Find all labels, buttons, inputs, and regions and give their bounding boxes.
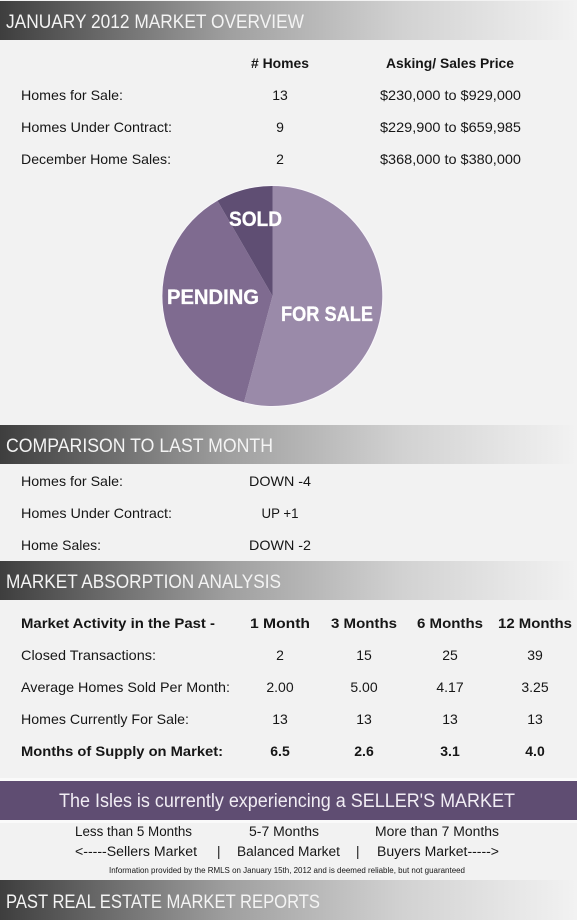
table: market absorption: 25 [442,647,458,663]
table: market absorption: 2 [276,647,284,663]
table: market overview: Asking/ Sales Price [386,55,514,71]
table: market absorption: Average Homes Sold Per Month: [21,679,230,695]
header: January 2012 market overview [0,1,577,40]
table: market absorption: 3.25 [521,679,549,695]
table: market absorption: 13 [527,711,543,727]
legend: market type scale [75,824,499,859]
pie chart: homes by status [162,185,384,407]
table: market absorption: 2.00 [266,679,294,695]
table: market overview: Homes for Sale: [21,87,123,103]
header: January 2012 market overview: JANUARY 2012 MARKET OVERVIEW [6,12,304,33]
table: comparison to last month [21,473,311,553]
table: market absorption: 5.00 [350,679,378,695]
table: market absorption: 13 [442,711,458,727]
table: market absorption: Homes Currently For Sale: [21,711,189,727]
table: market absorption: Months of Supply on Market: [21,743,223,759]
legend: market type scale: <-----Sellers Market [75,844,197,859]
table: comparison to last month: DOWN -2 [249,537,311,553]
table: market absorption: 13 [272,711,288,727]
table: market absorption: Closed Transactions: [21,647,156,663]
table: market absorption: 6 Months [417,615,483,631]
table: comparison to last month: Homes for Sale: [21,473,123,489]
header: past real estate market reports: PAST REAL ESTATE MARKET REPORTS [6,892,320,913]
banner: seller's market [0,778,577,823]
table: market overview: 9 [276,119,284,135]
disclaimer: Information provided by the RMLS on January 15th, 2012 and is deemed reliable, but not guaranteed [109,866,465,875]
legend: market type scale: 5-7 Months [249,824,319,839]
table: market absorption: Market Activity in the Past - [21,615,215,631]
table: market absorption: 12 Months [498,615,572,631]
header: comparison to last month [0,425,577,464]
table: market overview [21,55,521,167]
legend: market type scale: Less than 5 Months [75,824,192,839]
pie slice: pending [162,201,272,402]
legend: market type scale: More than 7 Months [375,824,499,839]
header: market absorption analysis: MARKET ABSORPTION ANALYSIS [6,572,281,593]
table: market overview: # Homes [251,55,309,71]
table: market absorption: 3 Months [331,615,397,631]
table: market absorption: 4.0 [525,743,545,759]
table: market overview: December Home Sales: [21,151,171,167]
header: comparison to last month: COMPARISON TO LAST MONTH [6,436,273,457]
pie slice: for sale [244,186,382,406]
table: market overview: $229,900 to $659,985 [380,119,521,135]
table: market absorption: 4.17 [436,679,464,695]
table: market absorption: 13 [356,711,372,727]
table: market absorption: 39 [527,647,543,663]
table: market absorption: 3.1 [440,743,460,759]
pie slice: sold [218,186,272,296]
table: market absorption: 15 [356,647,372,663]
legend: market type scale: Balanced Market [237,844,340,859]
table: market overview: $230,000 to $929,000 [380,87,521,103]
pie label: for sale: FOR SALE [281,303,373,326]
pie label: sold: SOLD [229,208,282,231]
legend: market type scale: | [217,844,221,859]
table: market absorption [21,615,572,759]
legend: market type scale: Buyers Market-----> [377,844,499,859]
table: market absorption: 6.5 [270,743,290,759]
table: market overview: 2 [276,151,284,167]
header: market absorption analysis [0,561,577,600]
table: comparison to last month: Home Sales: [21,537,101,553]
table: market overview: 13 [272,87,288,103]
table: market absorption: 1 Month [250,615,310,631]
table: comparison to last month: DOWN -4 [249,473,311,489]
legend: market type scale: | [356,844,360,859]
header: past real estate market reports [0,880,577,920]
table: market absorption: 2.6 [354,743,374,759]
table: market overview: Homes Under Contract: [21,119,172,135]
banner: seller's market: The Isles is currently experiencing a SELLER'S MARKET [59,791,515,812]
table: comparison to last month: Homes Under Contract: [21,505,172,521]
table: comparison to last month: UP +1 [262,505,299,521]
table: market overview: $368,000 to $380,000 [380,151,521,167]
pie label: pending: PENDING [167,286,259,309]
